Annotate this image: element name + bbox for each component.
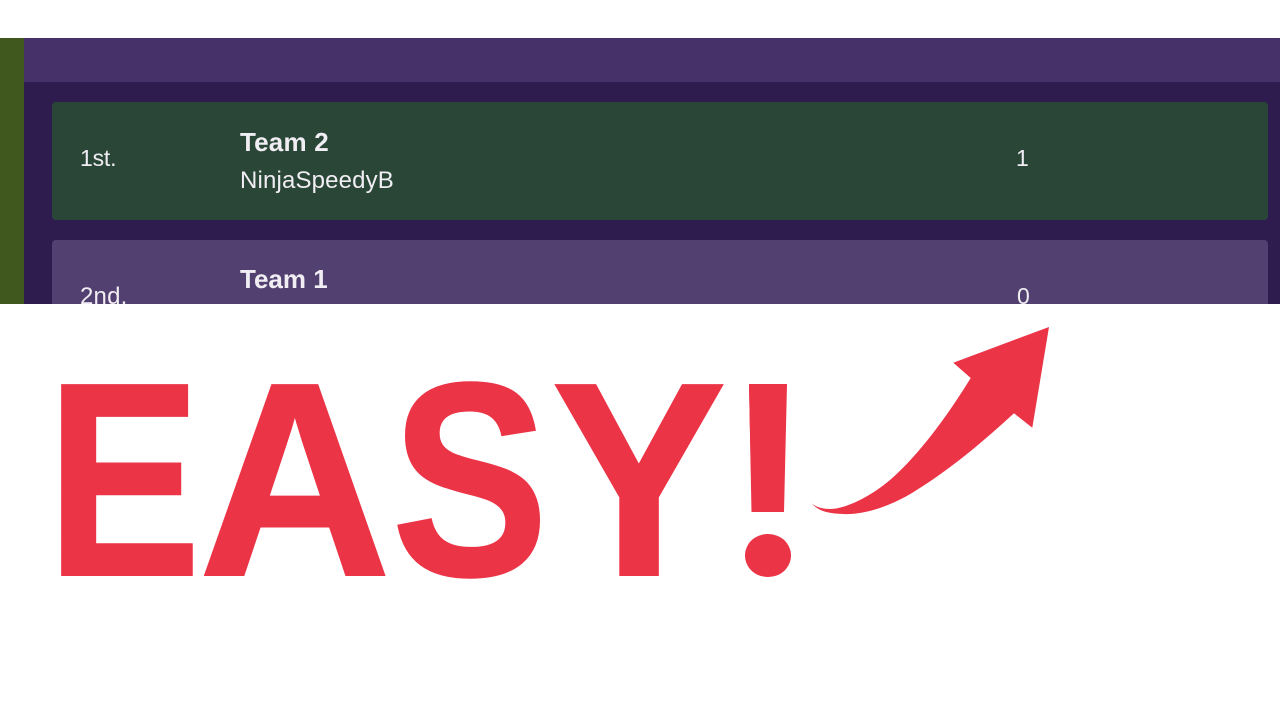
- row: first place: [52, 102, 1268, 220]
- heading: EASY!: E: [46, 325, 201, 634]
- heading: EASY!: [61, 381, 791, 579]
- leaderboard screenshot: [0, 38, 1280, 304]
- heading: EASY!: S: [392, 326, 548, 634]
- rank: 1st: 1st.: [80, 145, 116, 171]
- player name: NinjaSpeedyB: [240, 167, 394, 194]
- row: second place: [52, 240, 1268, 358]
- team name: Team 2: Team 2: [240, 127, 329, 157]
- purple header bar: [24, 38, 1280, 82]
- arrow: pointing to score: [812, 327, 1049, 514]
- green side strip: [0, 38, 24, 304]
- score: 1: 1: [1016, 145, 1029, 171]
- heading: EASY!: !: [725, 326, 810, 634]
- heading and arrow artwork: [61, 327, 1049, 579]
- heading: EASY!: A: [198, 325, 391, 634]
- heading: EASY!: Y: [552, 326, 726, 634]
- team name: Team 1: Team 1: [240, 264, 328, 294]
